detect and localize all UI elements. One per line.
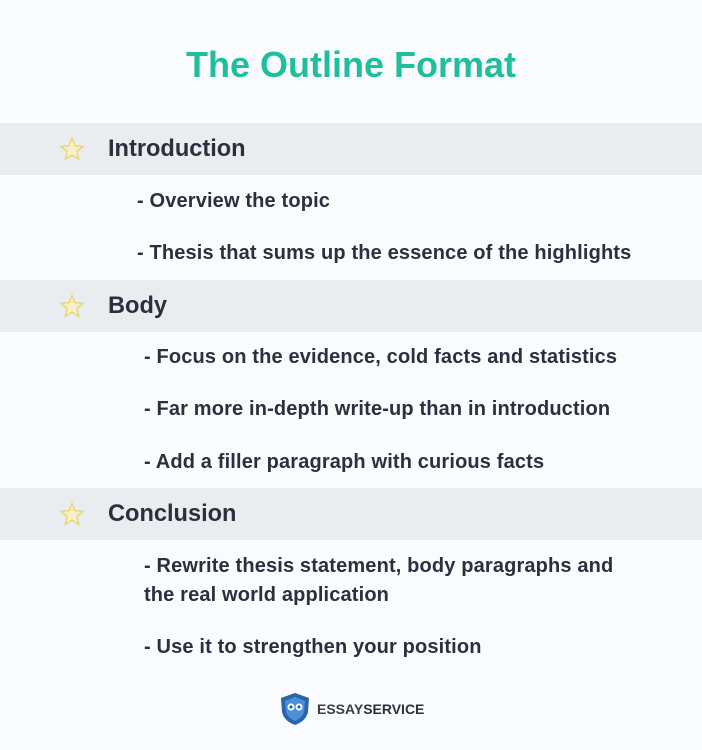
item: - Use it to strengthen your position: [144, 636, 482, 658]
icon: star: [60, 502, 84, 526]
logo: [281, 693, 424, 725]
item: - Focus on the evidence, cold facts and statistics: [144, 346, 617, 368]
icon: owl shield: [281, 693, 309, 725]
item: - Far more in-depth write-up than in introduction: [144, 398, 610, 420]
item: [144, 555, 613, 606]
heading: Body: [108, 293, 167, 319]
section header: Conclusion: [0, 488, 702, 540]
item: - Overview the topic: [137, 190, 330, 212]
item: the real world application: [144, 584, 389, 606]
heading: Conclusion: [108, 501, 236, 527]
title: The Outline Format: [186, 44, 516, 85]
section header: Introduction: [0, 123, 702, 175]
item: - Thesis that sums up the essence of the highlights: [137, 242, 631, 264]
heading: Introduction: [108, 136, 246, 162]
section header: Body: [0, 280, 702, 332]
icon: star: [60, 294, 84, 318]
icon: star: [60, 137, 84, 161]
item: - Rewrite thesis statement, body paragraphs and: [144, 555, 613, 577]
brand text: ESSAYSERVICE: [317, 701, 424, 717]
item: - Add a filler paragraph with curious facts: [144, 451, 544, 473]
